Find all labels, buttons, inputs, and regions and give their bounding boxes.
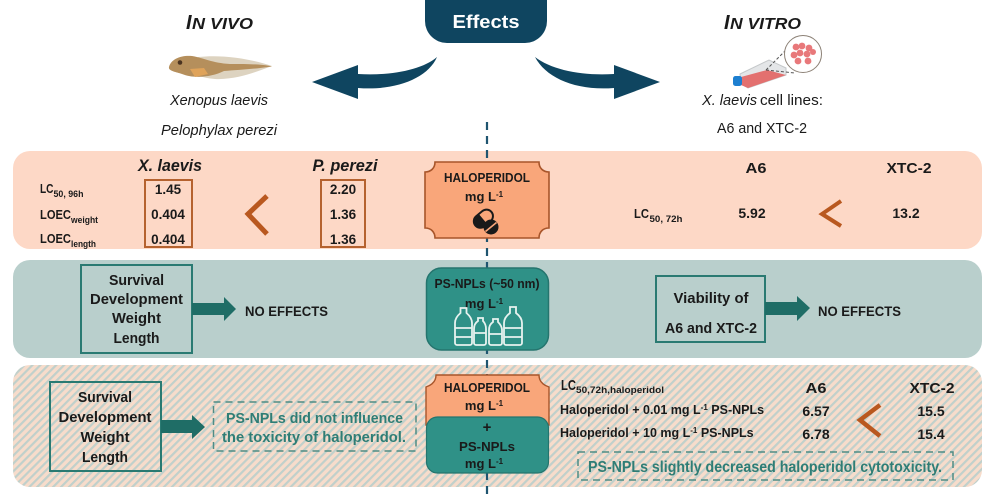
column A6: A6 bbox=[806, 380, 826, 397]
row labels bbox=[40, 181, 98, 249]
values box: P. perezi: 2.20 bbox=[330, 182, 356, 197]
column heading: P. perezi: P. perezi bbox=[312, 156, 379, 175]
heading: in vivo: N VIVO bbox=[192, 16, 253, 33]
arrow: no effects in vitro bbox=[765, 296, 810, 321]
icon: pills bbox=[471, 207, 498, 234]
badge: PS-NPLs: -1 bbox=[496, 297, 504, 306]
values box: P. perezi: 1.36 bbox=[330, 232, 357, 247]
row labels: length bbox=[71, 239, 96, 249]
values box: P. perezi bbox=[321, 180, 365, 247]
box: endpoints combined: Length bbox=[82, 449, 128, 466]
less-than symbol bbox=[860, 405, 880, 436]
box: endpoints in vivo: Length bbox=[114, 330, 160, 347]
box: endpoints in vivo: Development bbox=[90, 291, 183, 308]
badge: haloperidol plus PS-NPLs: mg L bbox=[465, 456, 496, 471]
column A6: 6.78 bbox=[802, 426, 830, 442]
callout: did not influence bbox=[214, 402, 416, 451]
arrow: no effects in vivo bbox=[192, 297, 236, 321]
box: endpoints combined: Survival bbox=[78, 389, 132, 406]
badge: haloperidol: -1 bbox=[496, 190, 504, 199]
box: endpoints in vivo: Survival bbox=[109, 272, 164, 289]
badge: haloperidol plus PS-NPLs: HALOPERIDOL bbox=[444, 380, 530, 395]
Effects pill bbox=[425, 0, 547, 43]
heading: in vitro bbox=[724, 12, 801, 34]
values box: X. laevis: 1.45 bbox=[155, 182, 182, 197]
badge: haloperidol plus PS-NPLs: + bbox=[483, 419, 492, 436]
column heading: A6: A6 bbox=[746, 160, 766, 177]
row labels: Haloperidol + 0.01 mg L bbox=[560, 403, 701, 417]
callout: slightly decreased cytotoxicity: PS-NPLs slightly decreased haloperidol cytotoxicity. bbox=[588, 459, 942, 476]
row labels: LOEC bbox=[40, 207, 72, 222]
less-than symbol bbox=[248, 196, 267, 234]
row labels: weight bbox=[70, 215, 98, 225]
row label bbox=[634, 206, 682, 224]
row labels: PS-NPLs bbox=[697, 426, 754, 440]
label: no effects in vivo: NO EFFECTS bbox=[245, 303, 328, 319]
less-than symbol bbox=[822, 201, 841, 226]
row labels: LOEC bbox=[40, 231, 72, 246]
cell line names: A6 and XTC-2 bbox=[717, 120, 807, 137]
panel: haloperidol row background bbox=[13, 151, 982, 249]
panel: PS-NPLs row background bbox=[13, 260, 982, 358]
row labels: -1 bbox=[690, 426, 698, 435]
arrow: combined result bbox=[161, 415, 205, 439]
combined in vitro data bbox=[560, 377, 954, 480]
column XTC-2: 15.5 bbox=[917, 403, 945, 419]
badge: haloperidol plus PS-NPLs: mg L bbox=[465, 398, 496, 413]
badge: haloperidol plus PS-NPLs bbox=[426, 375, 549, 473]
central dashed divider bbox=[486, 122, 488, 496]
heading: in vitro: I bbox=[724, 12, 730, 34]
badge: haloperidol bbox=[425, 162, 549, 238]
badge: haloperidol plus PS-NPLs: PS-NPLs bbox=[459, 439, 515, 454]
cell lines label: X. laevis bbox=[701, 92, 757, 109]
species: Pelophylax perezi: Pelophylax perezi bbox=[161, 122, 278, 139]
row labels: -1 bbox=[701, 403, 708, 412]
cell lines label: cell lines: bbox=[760, 92, 823, 109]
values box: X. laevis: 0.404 bbox=[151, 207, 185, 222]
row labels: Haloperidol + 10 mg L bbox=[560, 426, 690, 440]
values box: P. perezi: 1.36 bbox=[330, 207, 357, 222]
column XTC-2 bbox=[910, 380, 954, 442]
badge: haloperidol plus PS-NPLs: -1 bbox=[496, 399, 504, 408]
box: endpoints combined: Development bbox=[58, 409, 152, 426]
callout: did not influence: PS-NPLs did not influence bbox=[226, 410, 403, 427]
badge: haloperidol: HALOPERIDOL bbox=[444, 170, 530, 185]
arrow: to in vitro bbox=[535, 57, 660, 99]
row label: LC bbox=[634, 206, 650, 221]
values box: X. laevis: 0.404 bbox=[151, 232, 185, 247]
heading: in vivo bbox=[186, 12, 253, 34]
column heading: XTC-2: XTC-2 bbox=[886, 160, 932, 177]
column A6: 6.57 bbox=[802, 403, 830, 419]
row labels: PS-NPLs bbox=[708, 403, 764, 417]
box: viability in vitro bbox=[656, 276, 765, 342]
row labels: 50, 96h bbox=[54, 189, 84, 199]
haloperidol in vivo data bbox=[40, 156, 379, 249]
column A6 bbox=[802, 380, 830, 442]
arrow: to in vivo bbox=[312, 57, 437, 99]
badge: PS-NPLs: PS-NPLs (~50 nm) bbox=[434, 276, 540, 291]
panel: combined exposure row background bbox=[13, 365, 982, 487]
box: endpoints in vivo bbox=[81, 265, 192, 353]
row labels: LC bbox=[561, 377, 576, 394]
row labels bbox=[560, 377, 764, 440]
icon: plastic bottles bbox=[455, 307, 522, 345]
box: endpoints combined: Weight bbox=[80, 429, 130, 446]
haloperidol in vitro data bbox=[634, 160, 932, 226]
column XTC-2: XTC-2 bbox=[910, 380, 954, 397]
box: endpoints combined bbox=[50, 382, 161, 471]
label: no effects in vitro: NO EFFECTS bbox=[818, 303, 901, 319]
row labels: LC bbox=[40, 181, 54, 196]
icon: culture flask with cell magnifier bbox=[733, 36, 822, 88]
value: A6: 5.92 bbox=[738, 205, 766, 221]
heading: in vivo: I bbox=[186, 12, 192, 34]
badge: haloperidol: mg L bbox=[465, 189, 496, 204]
column XTC-2: 15.4 bbox=[917, 426, 945, 442]
box: viability in vitro: A6 and XTC-2 bbox=[665, 321, 757, 337]
icon: tadpole bbox=[169, 56, 272, 79]
column heading: X. laevis: X. laevis bbox=[137, 156, 202, 175]
callout: did not influence: the toxicity of haloperidol. bbox=[222, 429, 406, 446]
value: XTC-2: 13.2 bbox=[892, 205, 920, 221]
cell lines label bbox=[701, 92, 823, 109]
Effects pill: Effects bbox=[452, 12, 520, 32]
row label: 50, 72h bbox=[650, 214, 682, 224]
species: Xenopus laevis: Xenopus laevis bbox=[169, 92, 268, 109]
box: viability in vitro: Viability of bbox=[674, 291, 749, 307]
callout: slightly decreased cytotoxicity bbox=[578, 452, 953, 480]
heading: in vitro: N VITRO bbox=[730, 16, 801, 33]
values box: X. laevis bbox=[145, 180, 192, 247]
row labels: 50,72h,haloperidol bbox=[576, 385, 664, 396]
badge: PS-NPLs bbox=[426, 268, 548, 350]
box: endpoints in vivo: Weight bbox=[112, 310, 161, 327]
badge: PS-NPLs: mg L bbox=[465, 296, 496, 311]
badge: haloperidol plus PS-NPLs: -1 bbox=[496, 457, 504, 466]
